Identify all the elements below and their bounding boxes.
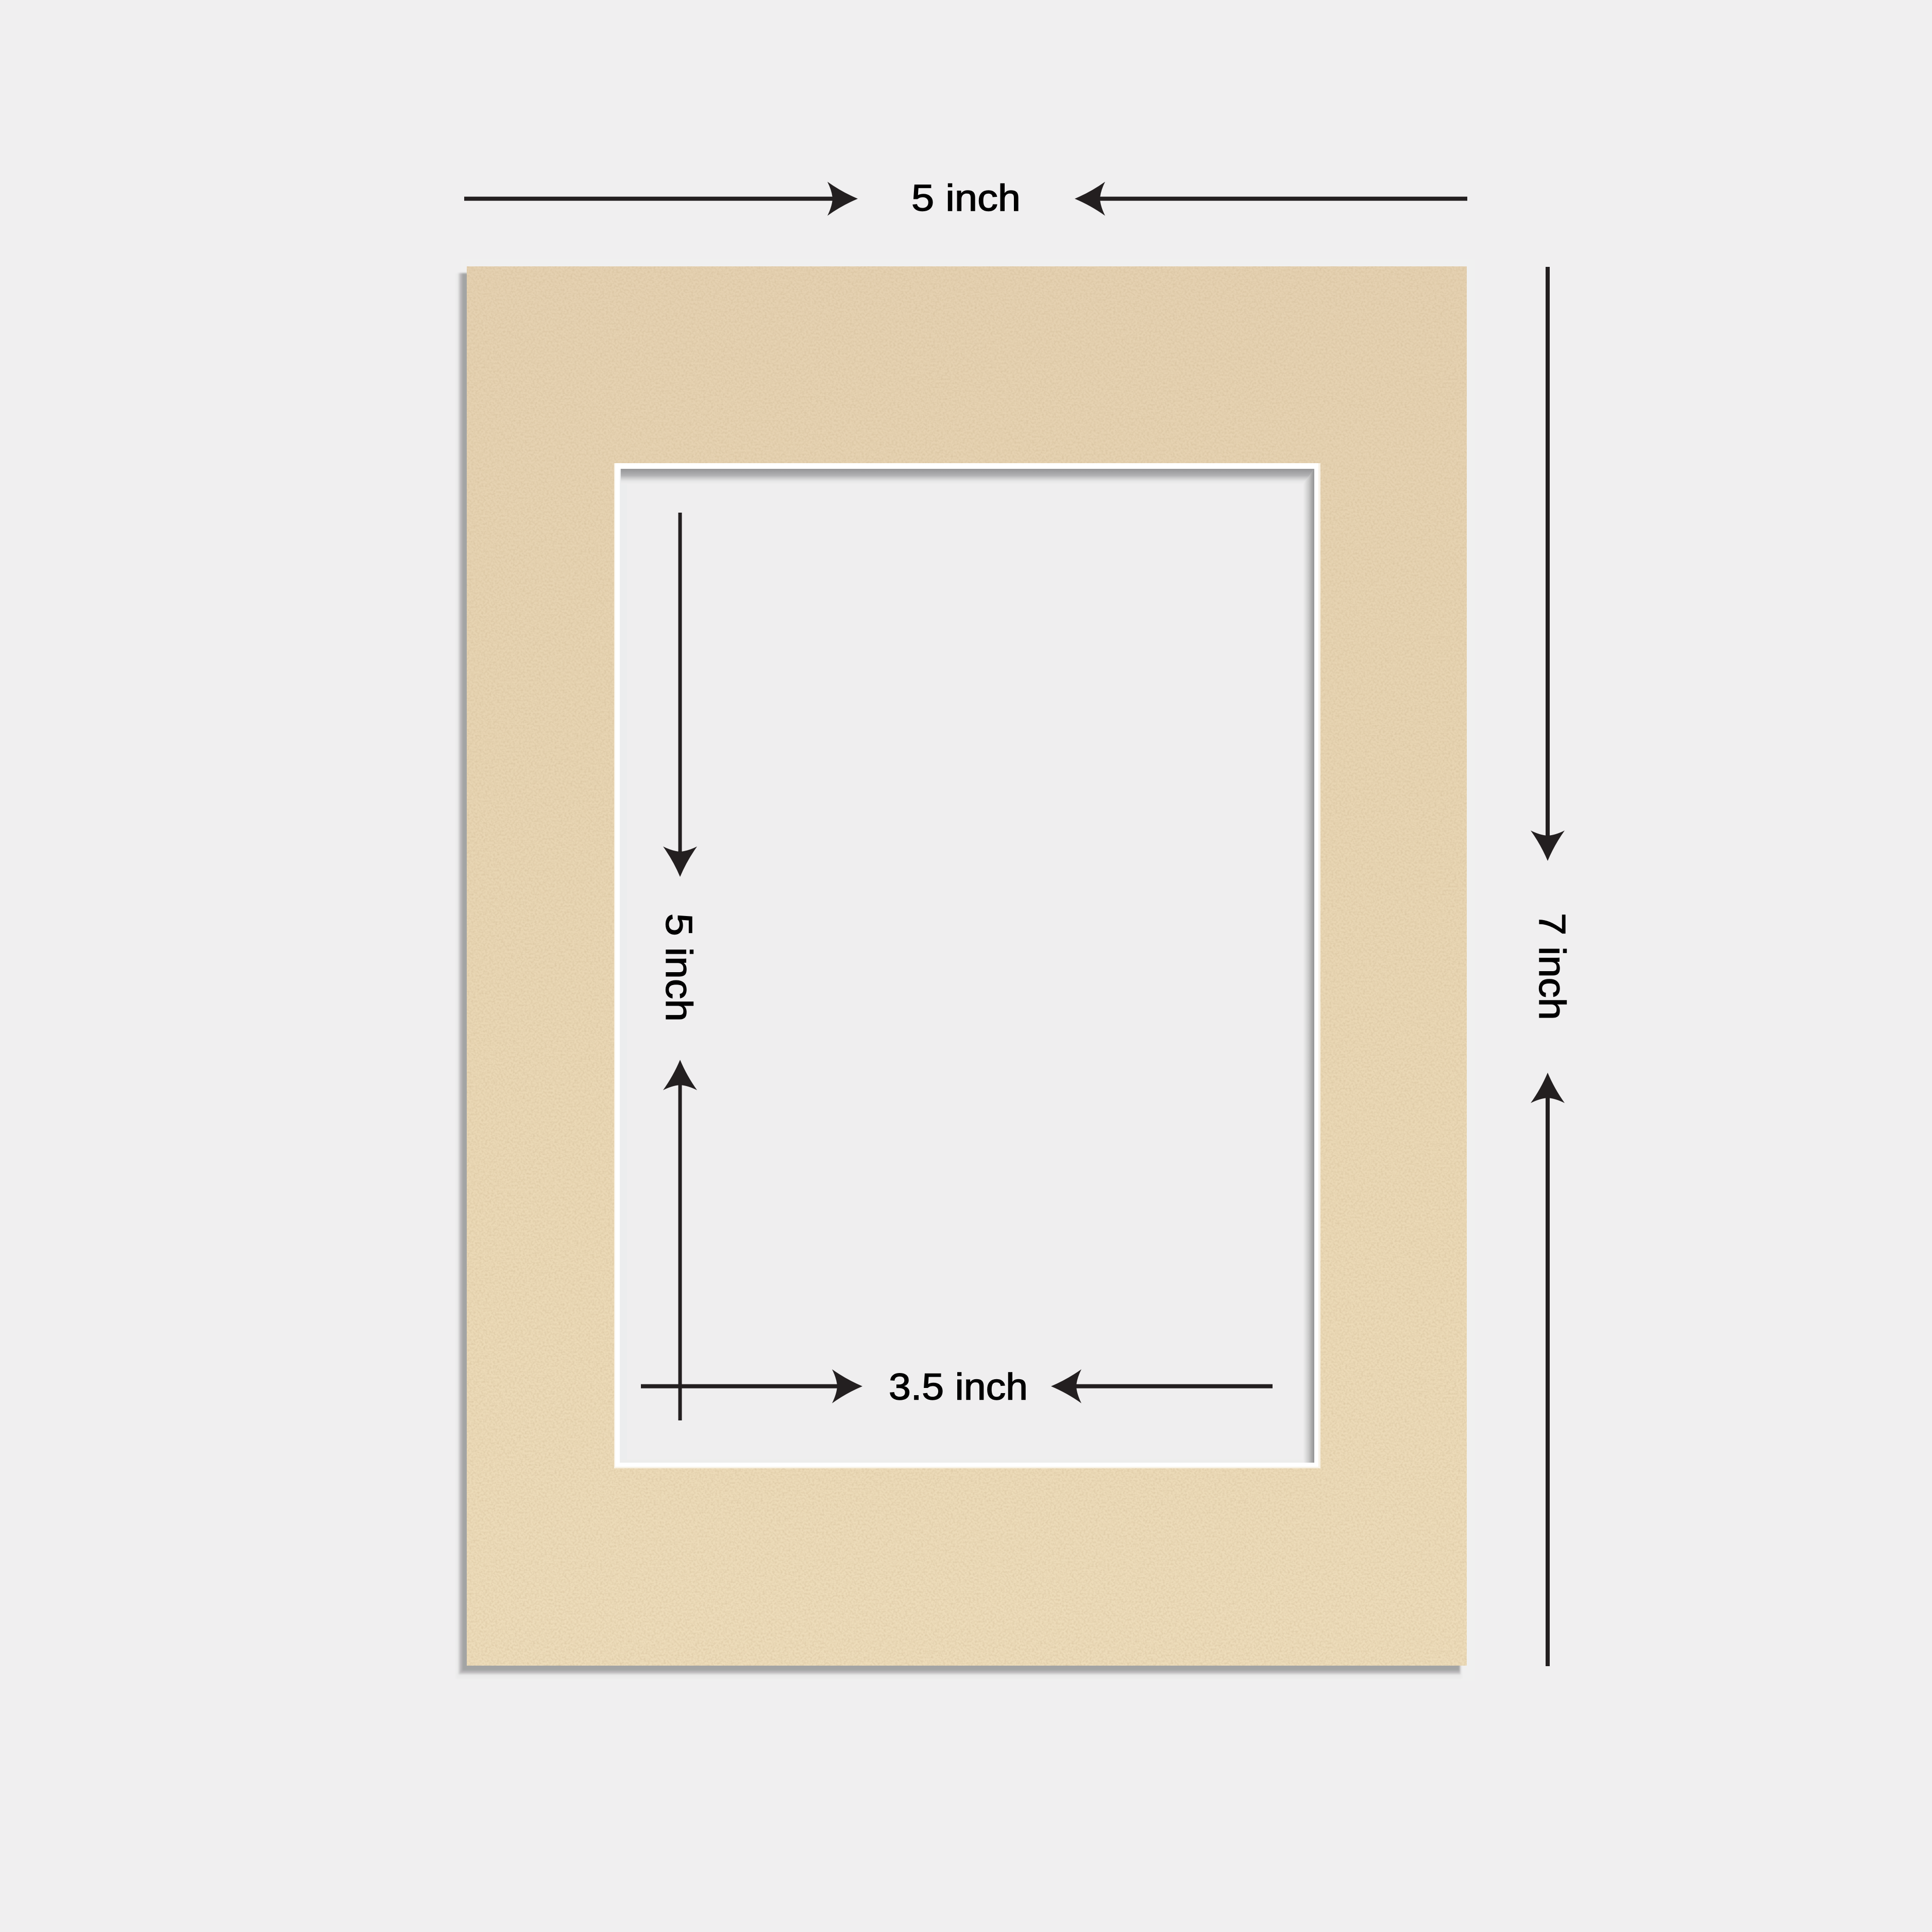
panel: mat board <box>456 259 1475 1681</box>
arrow: top dimension, left side <box>464 182 858 216</box>
mat drop shadow <box>456 273 1462 1679</box>
arrow: inner width, right side <box>1051 1369 1273 1403</box>
arrow: inner width, left side <box>641 1369 862 1403</box>
label: outer width: 5 inch <box>911 178 1021 219</box>
arrow: right dimension, upper <box>1531 267 1565 861</box>
arrow: top dimension, right side <box>1075 182 1467 216</box>
window opening <box>614 463 1320 1468</box>
arrow: inner height, upper <box>663 513 697 877</box>
label: outer height: 7 inch <box>1531 913 1572 1020</box>
arrow: right dimension, lower <box>1531 1073 1565 1666</box>
label: inner width: 3.5 inch <box>889 1367 1028 1408</box>
arrow: inner height, lower <box>663 1060 697 1420</box>
mat surface <box>467 266 1467 1666</box>
label: inner height: 5 inch <box>658 913 699 1022</box>
